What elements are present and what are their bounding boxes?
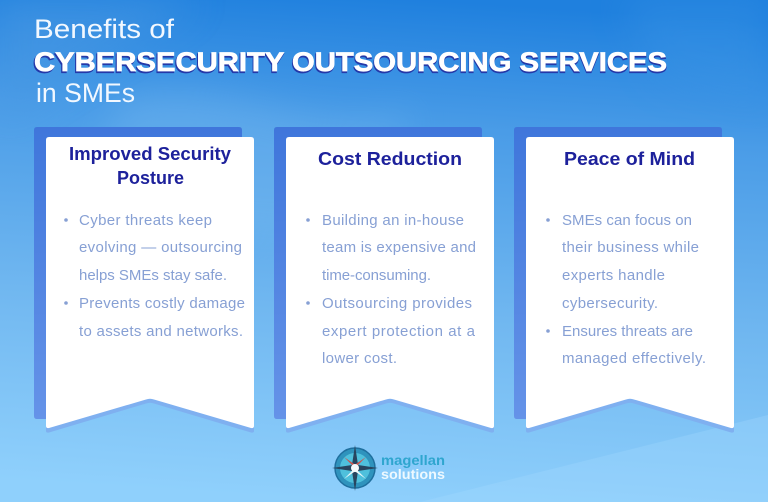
bullet list: Building an in-house bbox=[322, 212, 464, 229]
bullet list bbox=[306, 212, 476, 367]
title bbox=[33, 14, 667, 108]
bullet list: managed effectively. bbox=[562, 350, 706, 367]
bullet list: Cyber threats keep bbox=[79, 212, 212, 229]
ribbon card bbox=[286, 137, 494, 428]
panel backing bbox=[514, 127, 722, 419]
ribbon card bbox=[46, 137, 254, 428]
title line: main heading: CYBERSECURITY OUTSOURCING SERVICES bbox=[33, 48, 667, 78]
bullet list: to assets and networks. bbox=[79, 323, 243, 340]
heading: Posture bbox=[117, 168, 184, 188]
ribbon shadow bbox=[526, 398, 734, 433]
bullet list: SMEs can focus on bbox=[562, 212, 692, 229]
title line: Benefits of: Benefits of bbox=[34, 14, 175, 44]
wordmark: magellan bbox=[381, 452, 445, 468]
logo: magellan solutions bbox=[332, 445, 445, 491]
bullet list: helps SMEs stay safe. bbox=[79, 267, 227, 284]
bullet list: evolving — outsourcing bbox=[79, 239, 242, 256]
wordmark bbox=[381, 452, 445, 482]
icon: compass bbox=[332, 445, 378, 491]
bullet list: expert protection at a bbox=[322, 323, 476, 340]
ribbon card bbox=[526, 137, 734, 428]
panel backing bbox=[274, 127, 482, 419]
bullet list: time-consuming. bbox=[322, 267, 431, 284]
bullet list bbox=[546, 212, 706, 367]
bullet list: Ensures threats are bbox=[562, 323, 693, 340]
panel: cost reduction bbox=[274, 127, 494, 433]
panel backing bbox=[34, 127, 242, 419]
bullet list: lower cost. bbox=[322, 350, 397, 367]
ribbon shadow bbox=[286, 398, 494, 433]
title line: in SMEs: in SMEs bbox=[36, 78, 135, 108]
bullet list: Outsourcing provides bbox=[322, 295, 472, 312]
wordmark: solutions bbox=[381, 466, 445, 482]
heading: Peace of Mind bbox=[564, 149, 695, 169]
panel: improved security posture bbox=[34, 127, 254, 433]
panel: peace of mind bbox=[514, 127, 734, 433]
bullet list bbox=[64, 212, 245, 340]
bullet list: team is expensive and bbox=[322, 239, 476, 256]
heading bbox=[69, 144, 231, 188]
ribbon shadow bbox=[46, 398, 254, 433]
title line: main heading: CYBERSECURITY OUTSOURCING SERVICES bbox=[34, 47, 667, 77]
bullet list: experts handle bbox=[562, 267, 665, 284]
heading: Improved Security bbox=[69, 144, 231, 164]
bullet list: Prevents costly damage bbox=[79, 295, 245, 312]
bullet list: their business while bbox=[562, 239, 699, 256]
heading: Cost Reduction bbox=[318, 149, 462, 169]
bullet list: cybersecurity. bbox=[562, 295, 658, 312]
